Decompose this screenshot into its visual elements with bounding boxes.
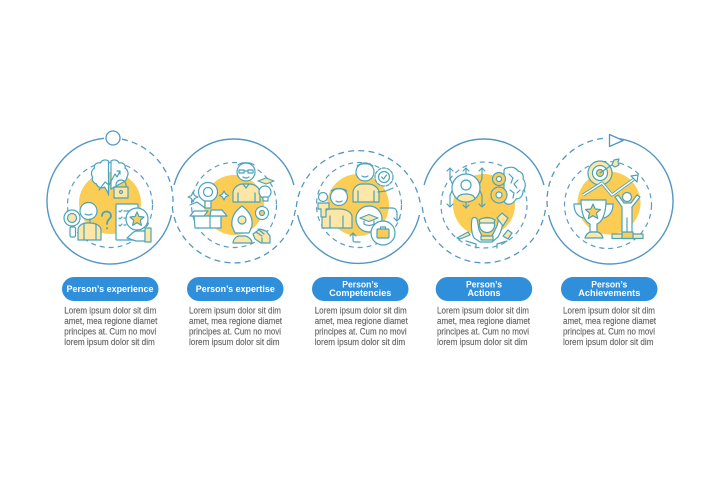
ring 5 solid arc	[549, 139, 673, 264]
column 3 text: principes at. Cum no movi	[315, 327, 407, 337]
ring 1 dashed arc	[122, 139, 173, 207]
icon: rocket	[232, 206, 252, 233]
icon: pencil	[457, 232, 470, 239]
end marker triangle	[610, 134, 623, 146]
icon: notebook	[497, 213, 508, 226]
inner dashed circle	[68, 162, 152, 248]
column 4 text: principes at. Cum no movi	[437, 327, 529, 337]
icon: star badge	[126, 208, 148, 230]
icon: growth arrow	[583, 177, 637, 195]
column 3 text: Lorem ipsum dolor sit dim	[315, 306, 407, 316]
column 1 label pill	[62, 277, 158, 301]
yellow disc	[578, 172, 640, 234]
ring 1 solid arc	[47, 138, 171, 264]
icon: gears	[492, 172, 506, 186]
start marker circle	[106, 131, 120, 145]
column 2 label pill: Person’s expertise	[196, 284, 275, 294]
icon: gear with check	[375, 168, 393, 186]
column 3 text: amet, mea regione diamet	[315, 316, 408, 326]
icon: target	[588, 161, 612, 185]
yellow disc	[327, 174, 389, 236]
icon: brush	[503, 230, 512, 239]
column 3 label pill: Competencies	[329, 288, 391, 298]
inner dashed circle	[192, 162, 276, 248]
yellow disc	[204, 175, 264, 235]
ring 4 dashed arc	[422, 207, 546, 263]
panel: achievements icon	[564, 159, 652, 248]
column 1 text: amet, mea regione diamet	[64, 316, 158, 326]
column 5 label pill	[561, 277, 658, 301]
icon: portrait badge	[452, 174, 480, 202]
icon: briefcase badge	[371, 221, 395, 245]
icon: man with glasses	[233, 184, 260, 202]
column 4 text: amet, mea regione diamet	[437, 316, 530, 326]
icon: top person	[353, 184, 379, 202]
column 2 label pill	[187, 277, 284, 301]
icon: lock	[116, 180, 126, 187]
column 2 text: Lorem ipsum dolor sit dim	[189, 306, 281, 316]
icon: lower arms	[466, 241, 507, 248]
column 5 text	[563, 306, 656, 347]
icon: open box	[194, 216, 221, 228]
panel: expertise icon	[188, 162, 276, 248]
column 1 text: Lorem ipsum dolor sit dim	[64, 306, 156, 316]
icon: person with raised arms	[471, 217, 503, 242]
column 3 text	[315, 306, 408, 347]
column 5 text: lorem ipsum dolor sit dim	[563, 337, 654, 347]
ring 2 dashed arc	[172, 207, 296, 263]
icon: growth arrow	[99, 171, 120, 190]
icon: magnifier	[64, 210, 80, 226]
ring 3 solid arc	[298, 215, 419, 263]
column 4 text: Lorem ipsum dolor sit dim	[437, 306, 529, 316]
inner dashed circle	[441, 162, 527, 248]
icon: direction arrows	[447, 168, 485, 208]
column 4 label pill: Actions	[468, 288, 500, 298]
icon: sparkles	[188, 191, 228, 202]
column 1 text: lorem ipsum dolor sit dim	[64, 337, 155, 347]
icon: checklist	[116, 204, 138, 240]
inner dashed circle	[564, 162, 652, 248]
icon: open hand	[378, 188, 393, 192]
ring 5 dashed arc	[547, 138, 605, 207]
column 2 text: principes at. Cum no movi	[189, 327, 281, 337]
icon: question mark	[102, 212, 111, 228]
column 3 label pill	[312, 277, 408, 301]
column 5 text: amet, mea regione diamet	[563, 316, 656, 326]
column 5 label pill: Achievements	[578, 288, 640, 298]
timeline rings	[47, 131, 673, 264]
column 3 text: lorem ipsum dolor sit dim	[315, 337, 405, 347]
inner dashed circle	[316, 162, 402, 248]
column 4 label pill	[436, 277, 532, 301]
icon: graduation cap badge	[356, 206, 382, 232]
column 5 text: principes at. Cum no movi	[563, 327, 655, 337]
icon: left person	[322, 209, 352, 228]
panel: competencies icon	[316, 162, 402, 248]
icon: idea in hand	[318, 192, 328, 202]
icon: robotic hand	[253, 229, 270, 243]
column 1 label pill: Person’s experience	[66, 284, 154, 294]
icon: brain	[91, 160, 128, 195]
column 5 text: Lorem ipsum dolor sit dim	[563, 306, 655, 316]
panel: actions icon	[441, 162, 527, 248]
icon: podium	[612, 234, 643, 238]
column 4 label pill: Person’s	[466, 279, 502, 289]
column 2 text	[189, 306, 282, 347]
column 1 text	[64, 306, 158, 347]
column 3 label pill: Person’s	[342, 279, 378, 289]
column 4 text: lorem ipsum dolor sit dim	[437, 337, 528, 347]
icon: flow arrows	[350, 208, 400, 242]
yellow disc	[453, 174, 515, 236]
icon: winner figure	[615, 195, 640, 233]
ring 2 solid arc	[174, 139, 294, 185]
panel: experience icon	[64, 160, 152, 248]
icon: trophy	[574, 204, 613, 218]
icon: graduation cap bulb	[258, 178, 274, 184]
yellow disc	[79, 172, 141, 234]
icon: gear	[256, 206, 268, 220]
column 2 text: lorem ipsum dolor sit dim	[189, 337, 280, 347]
column 5 label pill: Person’s	[591, 279, 627, 289]
ring 3 dashed arc	[296, 151, 421, 207]
icon: person	[78, 223, 101, 240]
column 2 text: amet, mea regione diamet	[189, 316, 282, 326]
ring 4 solid arc	[424, 139, 544, 185]
column 4 text	[437, 306, 530, 347]
icon: idea bulb	[198, 182, 218, 202]
column 1 text: principes at. Cum no movi	[64, 327, 156, 337]
icon: brain	[504, 167, 525, 204]
icon: open hand	[127, 231, 145, 241]
